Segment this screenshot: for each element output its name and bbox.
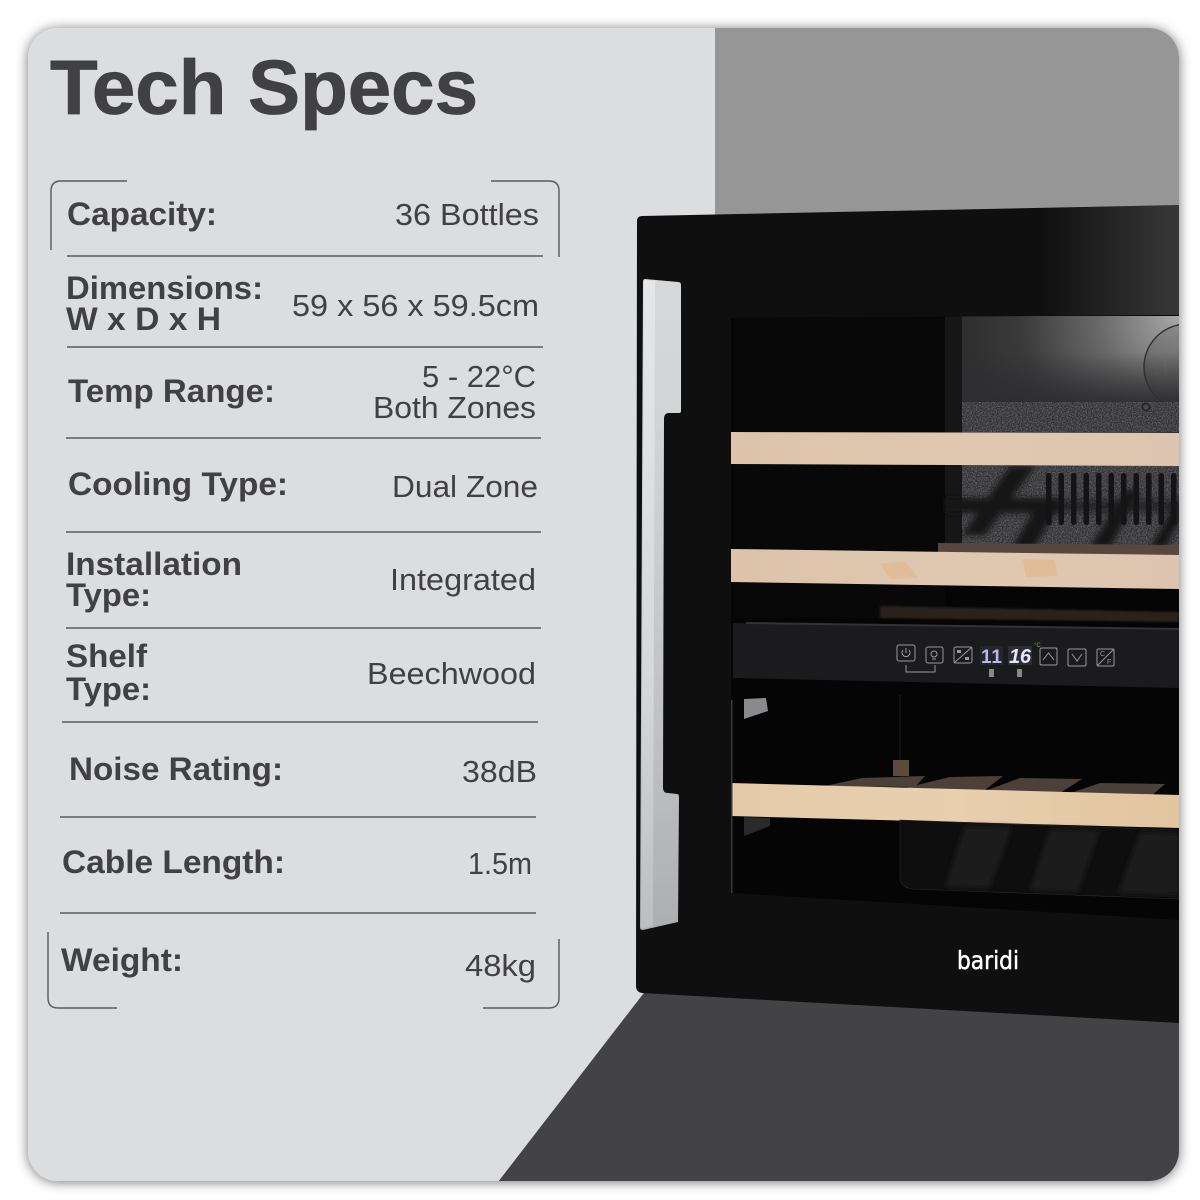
row: dimensions: [66, 270, 543, 347]
shelf 3: [731, 783, 1179, 828]
row: shelf type: Type:: [66, 671, 151, 707]
dark floor: [498, 985, 1180, 1182]
row: weight: [61, 942, 536, 983]
fan screw: [1142, 404, 1150, 410]
door handle: [640, 279, 681, 930]
row: cable length: Cable Length:: [62, 844, 285, 880]
row: capacity: [67, 196, 543, 256]
temperature display: 16: [1009, 646, 1032, 668]
vent slots: [1046, 473, 1176, 525]
row: noise rating: Noise Rating:: [69, 751, 283, 787]
shelf 2 marks: [880, 559, 1057, 579]
lower left bracket: [744, 698, 768, 719]
window left edge: [731, 700, 732, 895]
row: installation type: Installation: [66, 546, 242, 582]
cooler door: [636, 205, 1179, 1023]
row: dimensions: W x D x H: [66, 301, 221, 337]
textured wall upper: [1026, 406, 1179, 433]
row: capacity: 36 Bottles: [395, 197, 539, 232]
row: cooling type: [66, 466, 541, 532]
celsius indicator: °C: [1034, 643, 1041, 649]
lock bracket: [906, 665, 935, 672]
textured wall lower: [962, 464, 1182, 548]
top frame bracket: [51, 181, 559, 257]
baridi logo: baridi: [957, 946, 1019, 975]
lower rack slats: [827, 776, 1165, 794]
row: temp range: 5 - 22°C: [422, 359, 536, 394]
row: capacity: Capacity:: [67, 196, 217, 232]
down button: [1068, 649, 1086, 666]
unit button: C: [1100, 651, 1105, 658]
zone marks: [989, 669, 1022, 677]
unit button: F: [1107, 659, 1111, 666]
handle body: [640, 279, 681, 930]
door top sheen: [1069, 205, 1179, 316]
right side scene: [498, 28, 1200, 1182]
glass window: [731, 315, 1200, 925]
panel top edge: [746, 622, 1179, 630]
light button: [926, 647, 943, 663]
shelf 1: [731, 432, 1179, 466]
row: cable length: [60, 844, 536, 913]
row: shelf type: [62, 638, 538, 722]
grey wall panel: [715, 28, 1185, 228]
row: weight: 48kg: [465, 948, 536, 983]
row: cooling type: Dual Zone: [392, 469, 538, 504]
title: Tech Specs: [50, 45, 478, 131]
row: temp range: Both Zones: [373, 390, 536, 425]
row: noise rating: [60, 751, 537, 817]
row: installation type: Integrated: [390, 562, 536, 597]
row: dimensions: 59 x 56 x 59.5cm: [292, 288, 539, 323]
specs table: [48, 181, 559, 1008]
handle highlight: [641, 280, 655, 929]
bottle shadows: [945, 826, 1179, 895]
back wall right glow: [962, 316, 1179, 402]
temperature display: 11: [981, 647, 1002, 668]
shelf 2: [731, 549, 1179, 589]
unit button: [1097, 649, 1114, 666]
bottom frame bracket: [48, 932, 559, 1008]
temperature display: [980, 646, 1032, 668]
wine cooler product: [636, 205, 1200, 1023]
zone button: [954, 647, 972, 663]
power button: [897, 645, 915, 661]
row: weight: Weight:: [61, 942, 183, 978]
fan housing: [1143, 324, 1179, 398]
row: dimensions: Dimensions:: [66, 270, 263, 306]
row: noise rating: 38dB: [462, 754, 537, 789]
control panel icons: [897, 643, 1114, 677]
slats above panel: [880, 606, 1179, 622]
row: installation type: Type:: [66, 577, 151, 613]
bottom liner: [900, 820, 1179, 899]
row: installation type: [66, 546, 541, 628]
up button: [1040, 648, 1057, 665]
row: shelf type: Beechwood: [367, 656, 536, 691]
rack shadows: [945, 466, 1180, 548]
back wall left: [733, 318, 945, 618]
side rail: [945, 316, 962, 550]
lower bracket shadow: [744, 817, 770, 836]
rear shelf edge: [938, 543, 1179, 556]
row: shelf type: Shelf: [66, 638, 147, 674]
row: temp range: [66, 359, 541, 438]
textured wall lower fade: [1028, 358, 1179, 404]
row: temp range: Temp Range:: [68, 373, 275, 409]
peg: [893, 760, 909, 776]
rear divider line: [900, 695, 901, 760]
row: cable length: 1.5m: [468, 846, 532, 881]
control panel strip: [733, 623, 1179, 688]
row: cooling type: Cooling Type:: [68, 466, 288, 502]
